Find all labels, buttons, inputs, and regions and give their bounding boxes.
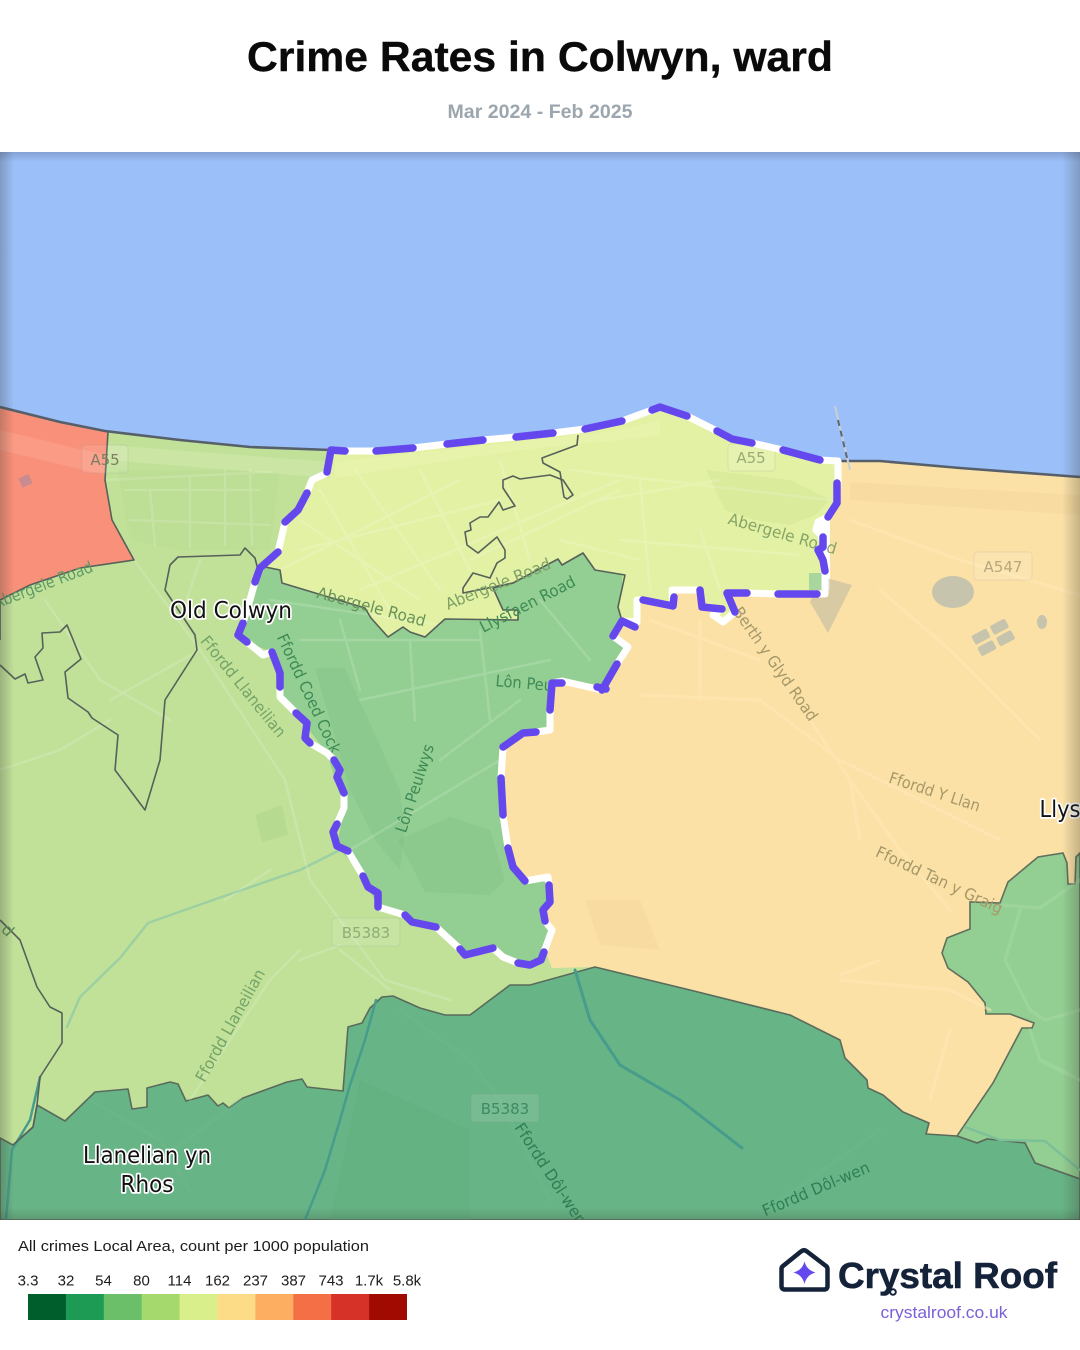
boundary: far-west line [0,920,62,1145]
legend value labels: 3.3 [18,1272,38,1290]
area: high-crime zone (red) [0,407,134,600]
road label: Abergele Road east: Abergele Road [726,509,839,558]
place label: Llanelian yn Rhos: Llanelian yn [83,1143,211,1169]
road label: Lon Peulwys horizontal: Lôn Peulwys [495,671,586,698]
road label: Ffordd Dol-wen east: Ffordd Dôl-wen [759,1158,872,1220]
map [0,152,1080,1229]
legend value labels: 5.8k [393,1272,422,1290]
legend colour scale [28,1294,407,1320]
road shield: A55 west [82,445,128,473]
road shield: A547 [974,552,1032,580]
sea [0,152,1080,492]
road label: Ffordd Dol-wen south: Ffordd Dôl-wen [511,1119,591,1229]
legend value labels: 237 [243,1272,268,1290]
legend value labels: 743 [318,1272,344,1290]
icon: wordmark tail dot [890,1289,896,1295]
area: green zone south-east [942,853,1080,1179]
legend value labels: 387 [281,1272,306,1290]
legend value labels: 80 [133,1272,150,1290]
title: Crime Rates in Colwyn, ward [247,33,833,80]
legend [18,1238,422,1320]
area: dark green zone south [0,967,1080,1220]
road label: Ffordd Tan y Graig: Ffordd Tan y Graig [873,842,1006,918]
road label: Ffordd Llaneilian south: Ffordd Llaneilian [191,966,269,1085]
road shield: B5383 south: B5383 [481,1100,529,1118]
road label: Ffordd Y Llan: Ffordd Y Llan [887,768,983,815]
place label: Llanelian yn Rhos: Rhos [120,1172,174,1198]
road label: Ffordd Coed Cock: Ffordd Coed Cock [273,631,345,757]
place label: Llanelian yn Rhos [83,1143,211,1198]
legend value labels [18,1272,422,1290]
internal boundary lines [0,432,625,1145]
boundary: ward interior winding line [463,435,578,593]
area: ward south part (green) [238,540,628,963]
road shield: A55 east [728,444,775,471]
rivers [6,850,1080,1220]
road network [0,459,1080,1109]
coastline [0,407,1080,477]
road label: Abergele Road rising: Abergele Road [442,554,553,614]
road label: Berth y Glyd Road: Berth y Glyd Road [729,603,822,725]
boundary: red zone edge [0,432,134,640]
legend value labels: 1.7k [355,1272,384,1290]
ward boundary: white outline [238,407,838,965]
road shield: A547: A547 [984,558,1022,576]
road label: Lon Peulwys vertical: Lôn Peulwys [392,742,438,835]
legend value labels: 114 [168,1272,191,1290]
road shield: A55 west: A55 [90,451,120,469]
area: low-crime land west (light green) [0,432,624,1144]
subtitle: date range: Mar 2024 - Feb 2025 [448,102,633,123]
legend value labels: 32 [58,1272,74,1290]
road shield: B5383 north [332,918,400,946]
road label: Llysfaen Road: Llysfaen Road [476,572,579,636]
map edge vignette [0,152,1080,1220]
pier [835,406,850,470]
place label: Old Colwyn: Old Colwyn [170,598,292,624]
road shield: A55 east: A55 [736,449,766,467]
wordmark: Crystal Roof [838,1255,1058,1296]
area: ward north part (yellow-green) [265,407,838,637]
boundary: west inner areas [0,548,258,810]
boundary: between ward parts [265,553,625,637]
icon: house with star [782,1250,828,1290]
area: moderate zone east (orange-yellow) [504,462,1080,1136]
ward boundary: purple dashes [238,407,837,965]
road label: Abergele Road centre: Abergele Road [315,583,428,630]
legend value labels: 162 [205,1272,230,1290]
legend value labels: 54 [95,1272,112,1290]
landscape shading patches [0,420,1080,1220]
website url: crystalroof.co.uk [880,1304,1008,1322]
logo: Crystal Roof [782,1250,1058,1322]
legend title: All crimes Local Area, count per 1000 population [18,1238,369,1255]
road label: Ffordd Llaneilian north: Ffordd Llaneilian [197,632,290,741]
road shield: B5383 south [471,1094,539,1122]
road shield: B5383 north: B5383 [342,924,390,942]
